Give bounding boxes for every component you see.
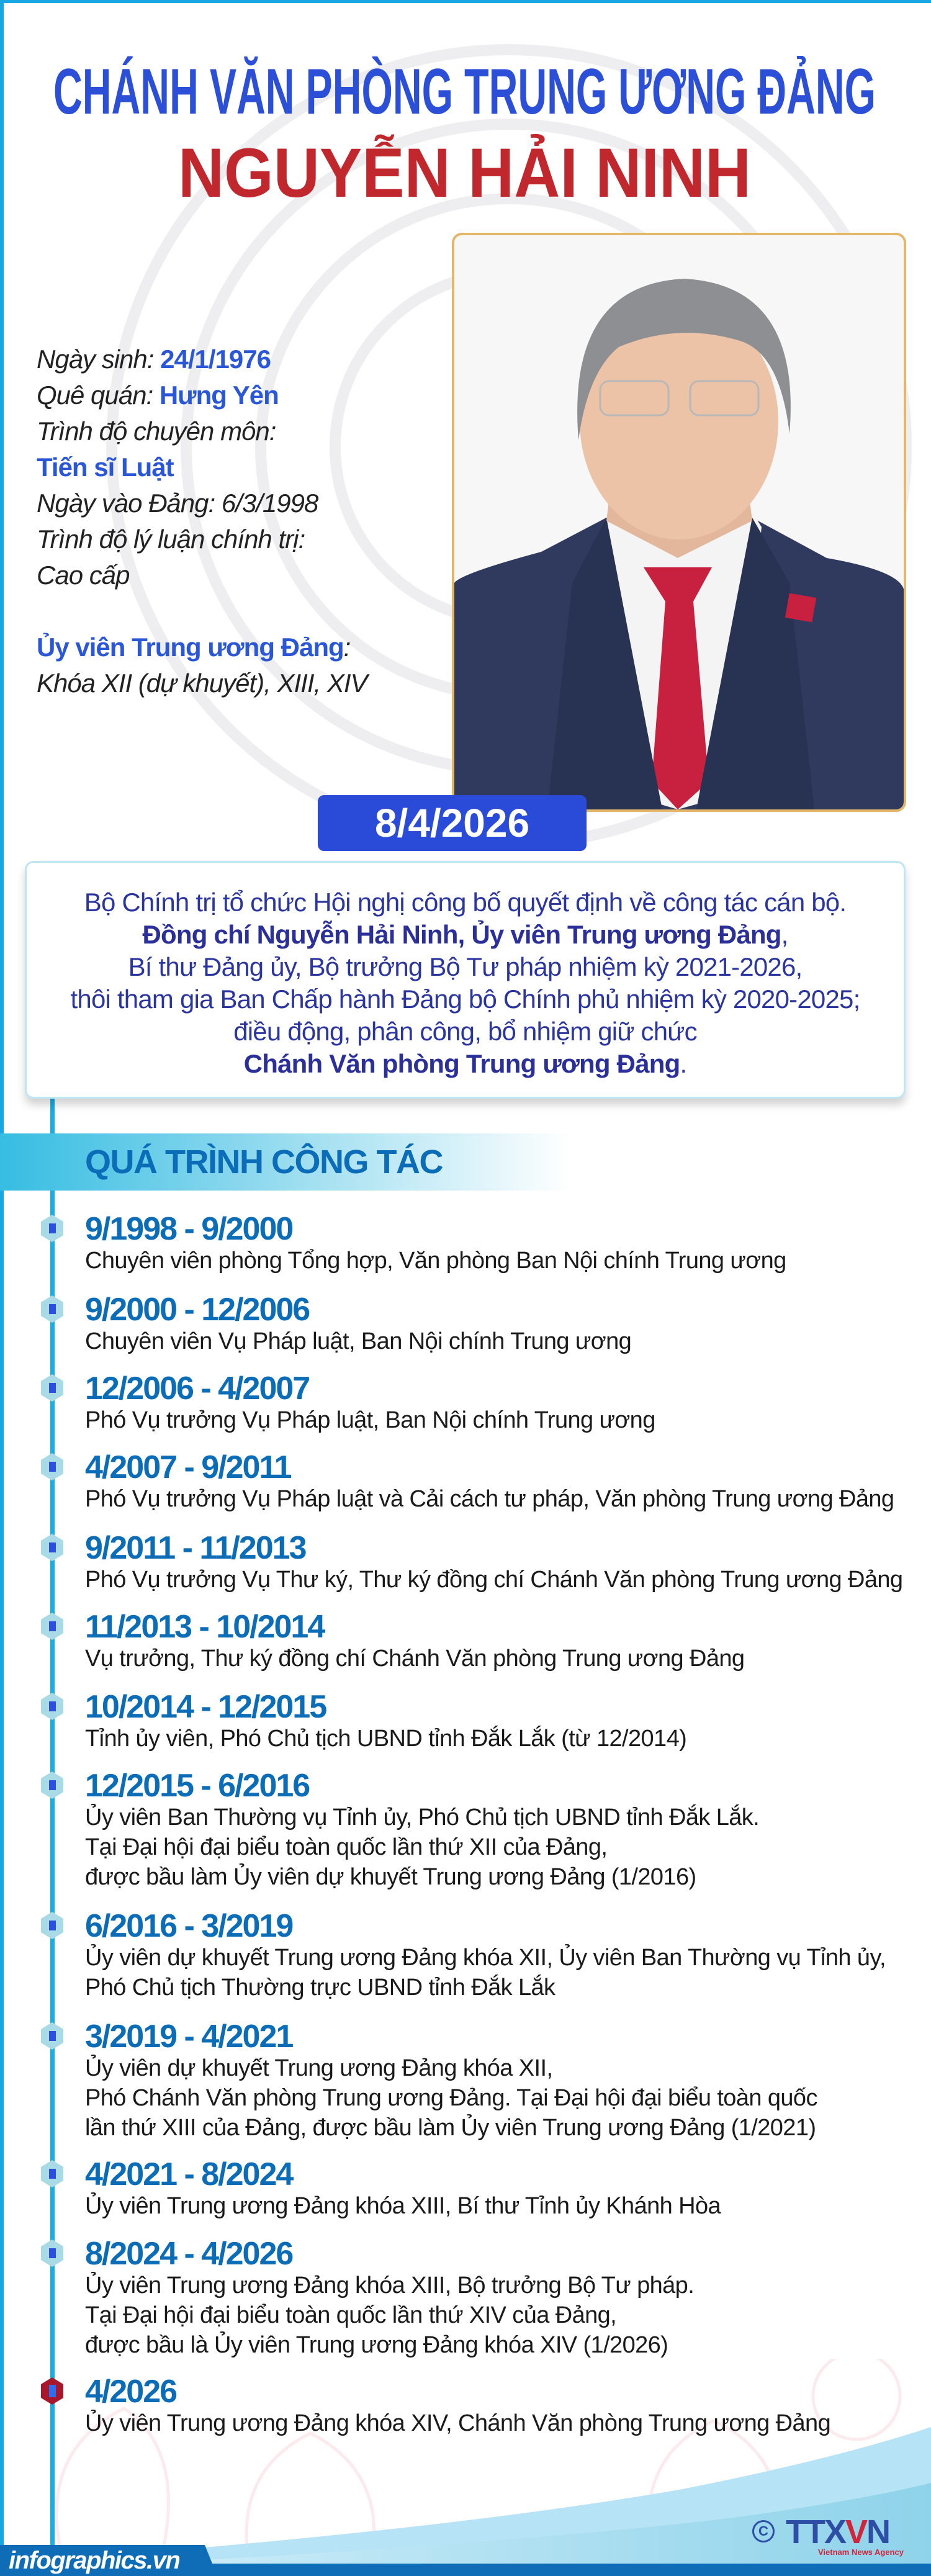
timeline entries: 4/2026 — [85, 2374, 176, 2410]
glasses — [600, 381, 758, 415]
timeline entries: 10/2014 - 12/2015 — [85, 1689, 326, 1725]
personal info: Khóa XII (dự khuyết), XIII, XIV — [37, 669, 367, 698]
timeline entries: Vụ trưởng, Thư ký đồng chí Chánh Văn phòng Trung ương Đảng — [85, 1646, 744, 1672]
title — [53, 56, 876, 205]
section header: QUÁ TRÌNH CÔNG TÁC — [0, 1133, 571, 1191]
personal info: Quê quán: Hưng Yên — [37, 381, 279, 410]
timeline entries: 12/2015 - 6/2016 — [85, 1768, 309, 1804]
entry 11 — [41, 2156, 721, 2219]
personal info — [37, 345, 370, 698]
page frame border — [0, 0, 931, 3]
entry 4 — [41, 1449, 894, 1512]
timeline entries: 9/1998 - 9/2000 — [85, 1211, 292, 1247]
timeline entries: Ủy viên Trung ương Đảng khóa XIII, Bộ trưởng Bộ Tư pháp. — [85, 2272, 694, 2299]
tie — [644, 567, 712, 809]
timeline entries: Phó Vụ trưởng Vụ Pháp luật, Ban Nội chính Trung ương — [85, 1407, 655, 1433]
timeline entries: 6/2016 - 3/2019 — [85, 1908, 292, 1944]
announcement box: Chánh Văn phòng Trung ương Đảng. — [244, 1049, 686, 1078]
timeline entries: 4/2021 - 8/2024 — [85, 2156, 292, 2192]
timeline entries: Chuyên viên Vụ Pháp luật, Ban Nội chính Trung ương — [85, 1328, 631, 1354]
timeline entries: 11/2013 - 10/2014 — [85, 1609, 324, 1645]
personal info: Ngày sinh: 24/1/1976 — [37, 345, 271, 374]
lotus background pattern — [55, 2359, 901, 2545]
timeline entries: Phó Vụ trưởng Vụ Pháp luật và Cải cách tư pháp, Văn phòng Trung ương Đảng — [85, 1486, 894, 1512]
logo: TTXVN: C — [758, 2523, 768, 2539]
entry 5 — [41, 1530, 902, 1593]
entry 13 (current) — [41, 2374, 830, 2528]
timeline entries: 3/2019 - 4/2021 — [85, 2019, 292, 2055]
announcement box: Bí thư Đảng ủy, Bộ trưởng Bộ Tư pháp nhiệm kỳ 2021-2026, — [128, 952, 802, 981]
personal info: Trình độ lý luận chính trị: — [37, 525, 305, 554]
footer: infographics.vn: infographics.vn — [9, 2547, 179, 2574]
hair — [577, 279, 791, 440]
announcement box: thôi tham gia Ban Chấp hành Đảng bộ Chính phủ nhiệm kỳ 2020-2025; — [71, 984, 860, 1014]
date badge: 8/4/2026 — [375, 801, 529, 845]
announcement box: Bộ Chính trị tổ chức Hội nghị công bố quyết định về công tác cán bộ. — [84, 888, 846, 917]
timeline entries: Chuyên viên phòng Tổng hợp, Văn phòng Ban Nội chính Trung ương — [85, 1248, 786, 1274]
footer wave — [206, 2427, 931, 2576]
date badge — [318, 795, 587, 851]
timeline entries: Tại Đại hội đại biểu toàn quốc lần thứ XIV của Đảng, — [85, 2302, 616, 2328]
personal info: Cao cấp — [37, 561, 129, 590]
timeline entries: được bầu là Ủy viên Trung ương Đảng khóa XIV (1/2026) — [85, 2332, 668, 2358]
lapels — [547, 518, 662, 809]
portrait photo — [452, 233, 906, 812]
timeline entries: Ủy viên Trung ương Đảng khóa XIV, Chánh Văn phòng Trung ương Đảng — [85, 2410, 830, 2436]
neck — [606, 471, 752, 558]
timeline entries: 9/2011 - 11/2013 — [85, 1530, 305, 1566]
announcement box — [25, 861, 906, 1099]
timeline entries: Ủy viên Ban Thường vụ Tỉnh ủy, Phó Chủ tịch UBND tỉnh Đắk Lắk. — [85, 1804, 759, 1831]
background pattern: bronze drum — [106, 44, 912, 842]
timeline entries: 12/2006 - 4/2007 — [85, 1371, 309, 1407]
timeline entries: Phó Vụ trưởng Vụ Thư ký, Thư ký đồng chí Chánh Văn phòng Trung ương Đảng — [85, 1567, 902, 1593]
timeline vertical line — [50, 1099, 55, 2551]
entry 8 — [41, 1768, 759, 1890]
timeline entries: Phó Chủ tịch Thường trực UBND tỉnh Đắk Lắk — [85, 1975, 555, 2001]
entry 1 — [41, 1211, 786, 1274]
entry 3 — [41, 1371, 655, 1433]
timeline entries: Ủy viên dự khuyết Trung ương Đảng khóa XII, — [85, 2055, 552, 2081]
logo: TTXVN: TTXVN — [786, 2513, 889, 2551]
entry 12 — [41, 2236, 694, 2358]
personal info: Ngày vào Đảng: 6/3/1998 — [37, 489, 318, 518]
entry 2 — [41, 1292, 631, 1354]
timeline entries: lần thứ XIII của Đảng, được bầu làm Ủy viên Trung ương Đảng (1/2021) — [85, 2115, 816, 2141]
timeline entries — [41, 1211, 902, 2436]
footer: infographics.vn — [0, 2545, 217, 2576]
timeline entries: 4/2007 - 9/2011 — [85, 1449, 290, 1485]
personal info: Trình độ chuyên môn: — [37, 417, 276, 446]
timeline entries: Ủy viên dự khuyết Trung ương Đảng khóa XII, Ủy viên Ban Thường vụ Tỉnh ủy, — [85, 1945, 886, 1971]
face — [580, 304, 778, 539]
timeline entries: Tại Đại hội đại biểu toàn quốc lần thứ XII của Đảng, — [85, 1834, 607, 1860]
shirt — [606, 502, 762, 809]
logo: TTXVN — [752, 2513, 904, 2557]
section header: QUÁ TRÌNH CÔNG TÁC: QUÁ TRÌNH CÔNG TÁC — [85, 1143, 443, 1181]
personal info: Tiến sĩ Luật — [37, 453, 174, 482]
entry 9 — [41, 1908, 886, 2001]
suit — [454, 518, 904, 809]
entry 7 — [41, 1689, 686, 1752]
logo: TTXVN: Vietnam News Agency — [818, 2547, 904, 2557]
timeline entries: được bầu làm Ủy viên dự khuyết Trung ương Đảng (1/2016) — [85, 1864, 696, 1890]
entry 10 — [41, 2019, 817, 2141]
timeline entries: Phó Chánh Văn phòng Trung ương Đảng. Tại Đại hội đại biểu toàn quốc — [85, 2085, 817, 2111]
personal info: Ủy viên Trung ương Đảng: — [37, 633, 350, 662]
timeline entries: Tỉnh ủy viên, Phó Chủ tịch UBND tỉnh Đắk Lắk (từ 12/2014) — [85, 1726, 686, 1752]
entry 6 — [41, 1609, 744, 1672]
timeline entries: Ủy viên Trung ương Đảng khóa XIII, Bí thư Tỉnh ủy Khánh Hòa — [85, 2193, 721, 2219]
pin — [785, 593, 816, 623]
timeline entries: 8/2024 - 4/2026 — [85, 2236, 292, 2272]
announcement box: Đồng chí Nguyễn Hải Ninh, Ủy viên Trung ương Đảng, — [143, 920, 788, 949]
announcement box: điều động, phân công, bổ nhiệm giữ chức — [233, 1017, 697, 1046]
timeline entries: 9/2000 - 12/2006 — [85, 1292, 309, 1328]
